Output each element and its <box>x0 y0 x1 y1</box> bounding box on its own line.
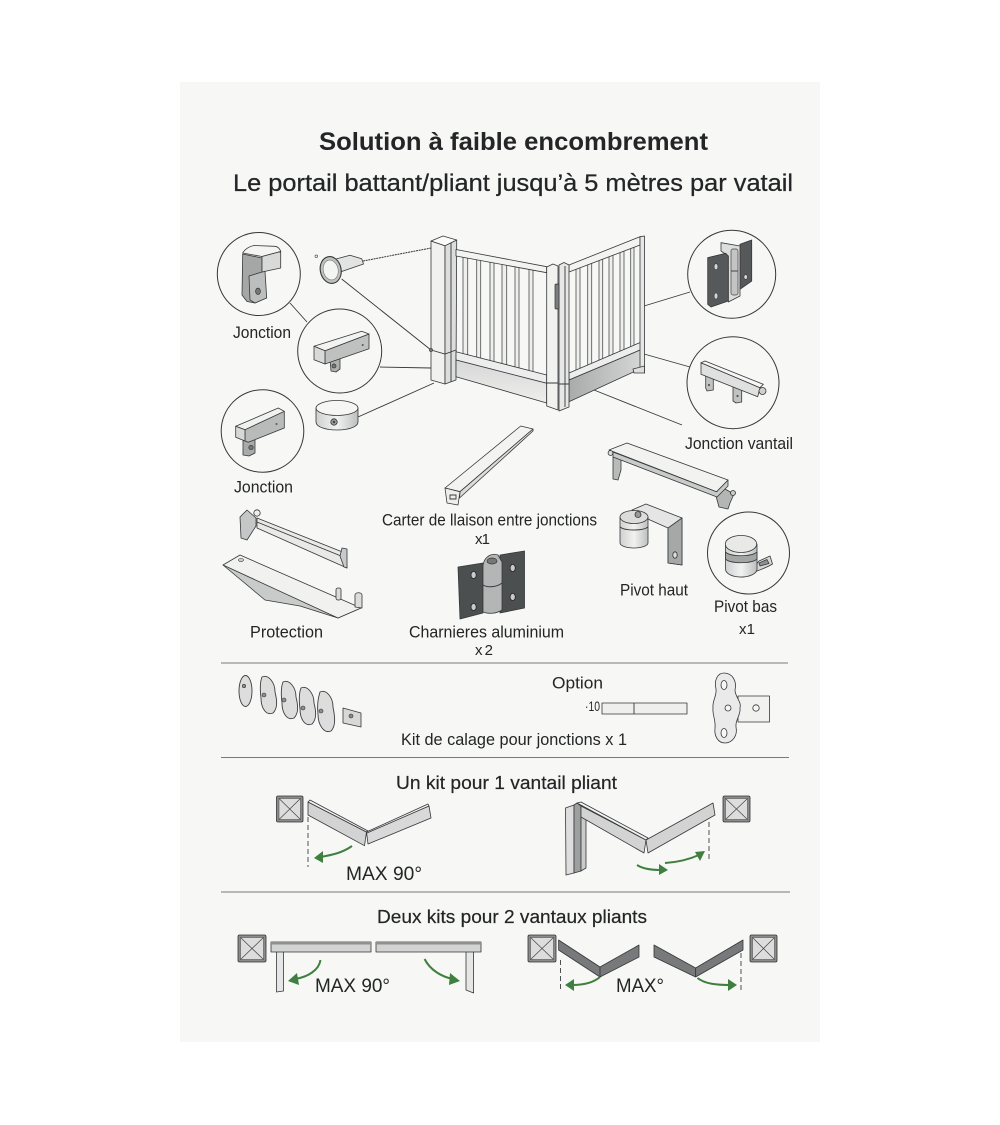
part: aluminium hinge <box>458 551 524 619</box>
label: Charnieres aluminium: Charnieres aluminium <box>409 624 564 642</box>
icon: cylinder cap <box>316 400 358 430</box>
panel: background sheet <box>180 82 820 1042</box>
label: x1 pivot: x 1 <box>739 621 755 638</box>
illustration: gate assembly <box>429 236 644 411</box>
icon: circle jonction vantail <box>687 337 779 429</box>
icon: circle jonction top <box>217 232 300 316</box>
right leaf <box>569 236 644 402</box>
label: Protection: Protection <box>250 624 323 642</box>
heading: Un kit: Un kit pour 1 vantail pliant <box>396 773 617 793</box>
diagram: two kits right <box>528 935 777 992</box>
label: Jonction vantail: Jonction vantail <box>685 435 793 453</box>
icon: circle hinge <box>688 230 776 318</box>
divider middle <box>221 756 789 758</box>
part: carter strap <box>445 426 533 505</box>
label: Kit de calage: Kit de calage pour jonctions x 1 <box>401 731 627 749</box>
diagram: two kits left <box>238 935 481 993</box>
post square <box>238 935 266 962</box>
title: Solution à faible encombrement <box>319 128 709 156</box>
label: x2: x 2 <box>475 642 493 659</box>
label: dimension 10: ·10 <box>585 698 600 714</box>
label: MAX degrees: MAX° <box>616 976 664 997</box>
post square <box>723 796 750 822</box>
post square <box>276 796 303 822</box>
post square <box>750 935 777 962</box>
label: Carter de liaison: Carter de llaison entre jonctions <box>382 512 597 530</box>
divider top <box>221 662 788 664</box>
icon: circle jonction middle <box>298 309 382 393</box>
centre stiles with handle <box>547 262 569 411</box>
part: option plate <box>713 673 770 743</box>
label: Pivot haut: Pivot haut <box>620 582 688 600</box>
label: MAX 90 bottom: MAX 90° <box>315 976 390 997</box>
heading: Deux kits: Deux kits pour 2 vantaux pliants <box>377 907 647 927</box>
part: jonction vantail bar <box>608 443 736 509</box>
left leaf <box>456 250 547 403</box>
icon: motor reel <box>315 255 364 285</box>
subtitle: Le portail battant/pliant jusqu’à 5 mètres par vatail <box>233 170 793 197</box>
part: pivot haut <box>620 504 682 565</box>
label: Pivot bas: Pivot bas <box>714 598 777 616</box>
icon: circle jonction bottom <box>221 390 304 472</box>
connector lines <box>290 248 690 425</box>
icon: shim kit <box>239 676 361 732</box>
diagram: one kit left <box>276 796 431 867</box>
part: protection plate <box>223 555 362 618</box>
label: Jonction top: Jonction <box>233 324 291 342</box>
icon: circle pivot bas <box>708 512 790 594</box>
label: Option: Option <box>552 674 603 692</box>
post square <box>528 935 556 962</box>
part: option strip <box>602 703 687 714</box>
label: MAX 90 top: MAX 90° <box>346 864 422 885</box>
label: Jonction bottom: Jonction <box>234 478 293 496</box>
divider lower <box>221 891 790 893</box>
label: x1 carter: x 1 <box>475 531 490 548</box>
diagram: one kit right <box>566 796 750 875</box>
part: protection rail <box>240 510 347 568</box>
gate post <box>429 236 457 384</box>
